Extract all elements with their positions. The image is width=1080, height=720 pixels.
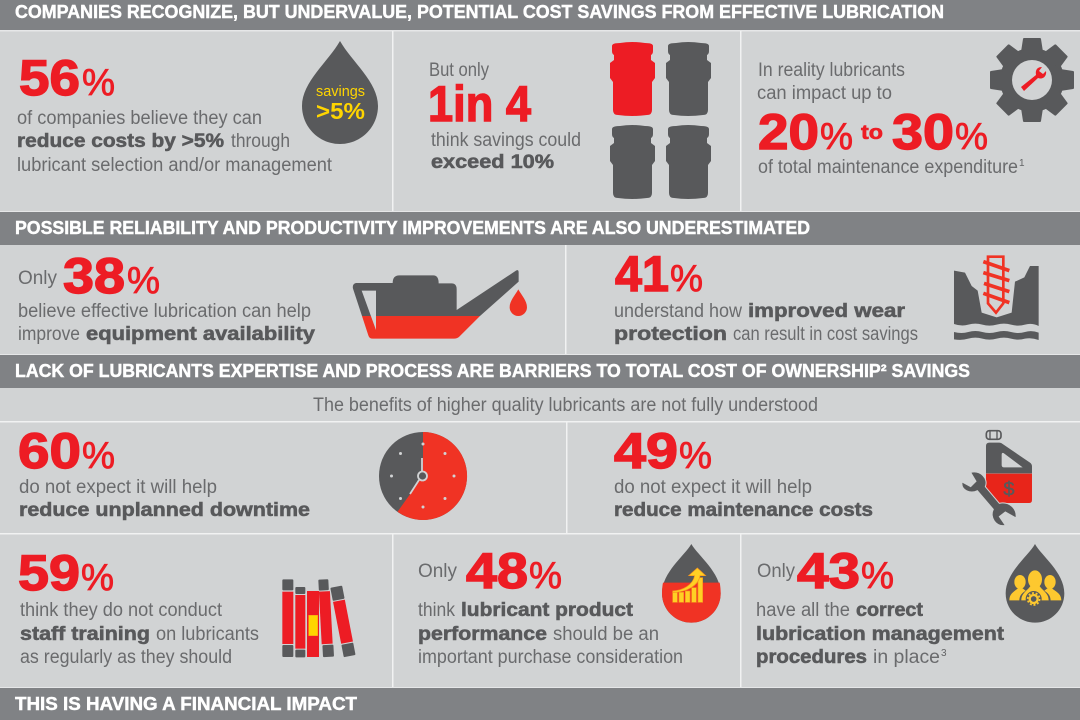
panel: 41 percent [614, 246, 1039, 345]
icon: oil can [353, 270, 527, 339]
stat: 59%: 59 [18, 545, 80, 601]
panel: 59 percent [18, 545, 356, 668]
panel: 43 percent [756, 543, 1064, 668]
text: product performance: think [418, 600, 455, 621]
text: wear protection: can result in cost savings [733, 324, 918, 345]
stat: only 43% [757, 543, 894, 599]
heading: barriers [0, 355, 1080, 388]
panel: 56 percent [17, 41, 378, 176]
text: management procedures [756, 600, 1005, 668]
text: in reality [757, 60, 905, 104]
stat: 59% [18, 545, 114, 601]
stat: 59%: % [81, 557, 114, 599]
stat: 20% to 30% [758, 104, 988, 160]
stat: 1 in 4: 1in 4 [428, 76, 531, 132]
text: equipment availability: believe effective lubrication can help [18, 301, 311, 322]
text: companies believe: reduce costs by >5% [17, 131, 224, 152]
heading: barriers: LACK OF LUBRICANTS EXPERTISE AND PROCESS ARE BARRIERS TO TOTAL COST OF OWNERSHIP² SAVINGS [15, 361, 970, 381]
stat: 49% [614, 423, 712, 479]
panel: 60 percent [18, 423, 467, 521]
text: in reality: can impact up to [757, 83, 892, 104]
text: management procedures: have all the [756, 600, 850, 621]
text: maintenance costs: reduce maintenance costs [614, 500, 873, 521]
text: maintenance costs: do not expect it will help [614, 477, 812, 498]
icon: gear and wrench [991, 39, 1073, 121]
icon: savings drop: savings [316, 83, 365, 100]
text: exceed 10%: exceed 10% [431, 152, 554, 173]
stat: 41%: 41 [615, 246, 669, 302]
heading: cost savings: COMPANIES RECOGNIZE, BUT UNDERVALUE, POTENTIAL COST SAVINGS FROM EFFECTIVE LUBRICATION [15, 2, 944, 22]
stat: 20% to 30%: % [955, 116, 988, 158]
text: companies believe: of companies believe they can [17, 108, 262, 129]
stat: only 43%: 43 [797, 543, 860, 599]
text: product performance: should be an [553, 624, 659, 645]
icon: drop with people [1006, 544, 1064, 623]
text: maintenance expenditure: 1 [1019, 158, 1025, 169]
icon: books [282, 579, 356, 657]
stat: 41%: % [670, 258, 703, 300]
text: in reality: In reality lubricants [758, 60, 905, 81]
stat: only 48%: Only [418, 561, 457, 582]
panel: 49 percent [614, 423, 1032, 526]
panel: 1 in 4 [428, 42, 711, 199]
icon: savings drop [302, 41, 378, 144]
text: unplanned downtime: do not expect it will help [19, 477, 217, 498]
text: but only: But only [429, 60, 489, 81]
caption: benefits not understood: The benefits of higher quality lubricants are not fully understood [313, 395, 818, 416]
text: management procedures: 3 [941, 648, 947, 659]
text: equipment availability: improve [18, 324, 80, 345]
stat: only 48%: 48 [466, 543, 528, 599]
text: management procedures: procedures [756, 647, 867, 668]
text: equipment availability: equipment availability [86, 324, 315, 345]
text: maintenance expenditure: of total maintenance expenditure [758, 157, 1018, 178]
text: management procedures: correct [856, 600, 924, 621]
text: companies believe [17, 108, 333, 176]
text: unplanned downtime: reduce unplanned downtime [19, 500, 310, 521]
stat: 49%: 49 [614, 423, 678, 479]
stat: 60%: 60 [18, 423, 81, 479]
stat: only 43%: Only [757, 561, 795, 582]
text: staff training: staff training [20, 624, 150, 645]
icon: jerry can and wrench: $ [1003, 480, 1015, 501]
stat: only 38%: 38 [63, 248, 125, 304]
text: unplanned downtime [19, 477, 310, 521]
stat: 60%: % [82, 435, 115, 477]
stat: only 38%: % [127, 260, 160, 302]
text: product performance: lubricant product [461, 600, 634, 621]
text: product performance: performance [418, 624, 547, 645]
text: staff training: on lubricants [156, 624, 259, 645]
stat: 49%: % [679, 435, 712, 477]
stat: only 43%: % [861, 555, 894, 597]
heading: reliability [0, 212, 1080, 245]
stat: 56% [19, 50, 115, 106]
icon: clock [379, 432, 467, 520]
text: wear protection: protection [614, 324, 727, 345]
heading: financial impact [0, 688, 1080, 720]
stat: 20% to 30%: to [861, 122, 883, 144]
icon: four buckets [610, 42, 711, 199]
text: wear protection: understand how [614, 301, 742, 322]
text: companies believe: through [231, 131, 290, 152]
stat: only 48% [418, 543, 562, 599]
text: staff training [20, 600, 259, 668]
text: staff training: think they do not conduct [20, 600, 223, 621]
panel: 38 percent [18, 248, 527, 345]
heading: cost savings [0, 0, 1080, 30]
icon: drill in worn surface [954, 257, 1039, 340]
text: management procedures: in place [873, 647, 940, 668]
text: maintenance costs [614, 477, 873, 521]
text: wear protection: improved wear [748, 301, 906, 322]
text: exceed 10% [431, 130, 581, 173]
icon: savings drop: >5% [316, 98, 365, 124]
text: product performance [418, 600, 683, 668]
heading: financial impact: THIS IS HAVING A FINANCIAL IMPACT [15, 694, 357, 714]
panel: 20 to 30 percent [757, 39, 1073, 178]
stat: 20% to 30%: 20 [758, 104, 819, 160]
heading: reliability: POSSIBLE RELIABILITY AND PRODUCTIVITY IMPROVEMENTS ARE ALSO UNDERESTIMATED [15, 218, 810, 238]
text: staff training: as regularly as they should [20, 647, 232, 668]
text: companies believe: lubricant selection and/or management [17, 155, 333, 176]
panel: 48 percent [418, 543, 721, 668]
text: exceed 10%: think savings could [431, 130, 581, 151]
stat: 60% [18, 423, 115, 479]
stat: only 38%: Only [18, 268, 57, 289]
icon: drop with growth chart [662, 544, 721, 623]
icon: jerry can and wrench [962, 431, 1032, 526]
stat: only 38% [18, 248, 160, 304]
text: product performance: important purchase consideration [418, 647, 683, 668]
stat: 20% to 30%: 30 [892, 104, 954, 160]
stat: 56%: 56 [19, 50, 80, 106]
text: equipment availability [18, 301, 315, 345]
stat: 41% [615, 246, 703, 302]
text: wear protection [614, 301, 918, 345]
stat: 56%: % [82, 62, 115, 104]
text: management procedures: lubrication management [756, 624, 1005, 645]
stat: only 48%: % [529, 555, 562, 597]
stat: 20% to 30%: % [820, 116, 853, 158]
